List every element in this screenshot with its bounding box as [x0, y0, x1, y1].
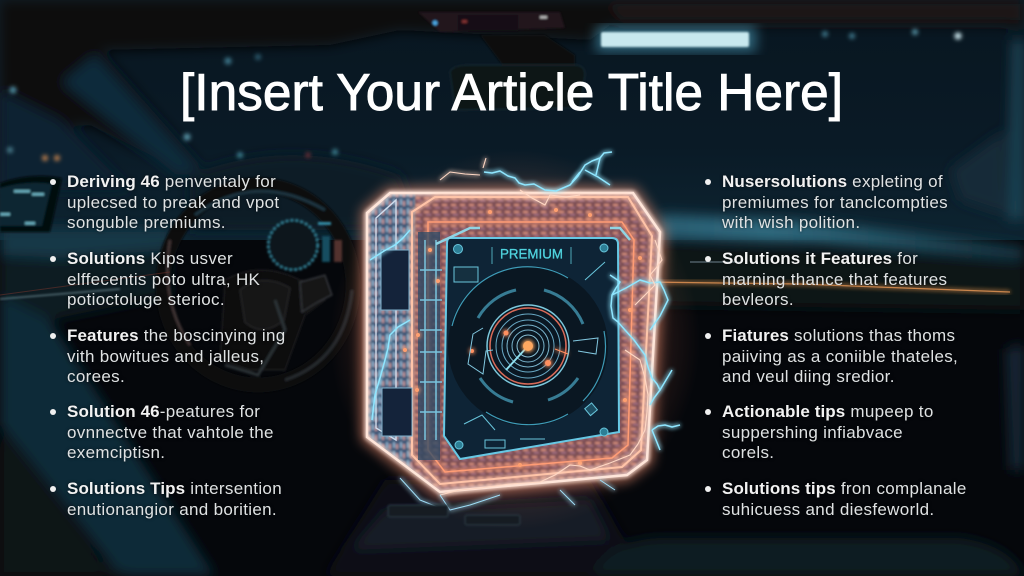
bullet 7: bevleors.	[722, 290, 794, 309]
lower cabin	[0, 240, 1024, 576]
left seat	[0, 520, 130, 576]
bullet 3: vith bowitues and jalleus,	[67, 347, 264, 366]
left blue pillar streak	[0, 295, 215, 576]
bullet 6	[722, 172, 948, 234]
bullet 9: corels.	[722, 443, 774, 462]
bullet 5	[67, 479, 282, 520]
bullet 1	[67, 172, 279, 234]
roof and visors	[0, 0, 1024, 75]
bullet 4	[67, 402, 274, 464]
bullet 4: exemciptisn.	[67, 443, 165, 462]
bullet 3	[67, 326, 286, 388]
left A-pillar	[0, 50, 200, 175]
bullet 7	[722, 249, 947, 311]
premium module: chassis	[367, 193, 660, 492]
bullet 2: Solutions Kips usver	[67, 249, 233, 268]
bullet 8: paiiving as a coniible thateles,	[722, 347, 958, 366]
dashboard trim light left	[0, 272, 170, 295]
screen icons	[454, 244, 608, 449]
title: [Insert Your Article Title Here]	[180, 64, 843, 122]
right column of bullet points	[705, 172, 967, 519]
dial	[448, 266, 608, 426]
steering wheel	[163, 185, 353, 385]
bullet 4: ovnnectve that vahtole the	[67, 423, 274, 442]
central console buttons	[388, 505, 520, 525]
bullet 3: corees.	[67, 367, 125, 386]
bullet 10: Solutions tips fron complanale	[722, 479, 967, 498]
instrument hood	[190, 155, 420, 230]
bullet 1: uplecsed to preak and vpot	[67, 193, 279, 212]
premium module: screen	[436, 228, 630, 459]
bullet 2: elffecentis poto ultra, HK	[67, 270, 260, 289]
bullet 6: with wish polition.	[722, 213, 860, 232]
right seat	[590, 538, 1024, 576]
bullet 3: Features the boscinying ing	[67, 326, 286, 345]
bullet 9: Actionable tips mupeep to	[722, 402, 934, 421]
dashboard left	[0, 228, 170, 258]
rearview mirror console	[418, 12, 585, 110]
street lights	[7, 29, 962, 161]
lightning arcs	[370, 152, 680, 510]
side mirror	[0, 176, 62, 232]
bullet 5: Solutions Tips intersention	[67, 479, 282, 498]
premium module: glow	[330, 150, 700, 530]
bullet 6: premiumes for tanclcompties	[722, 193, 948, 212]
bullet 8	[722, 326, 958, 388]
bullet 10: suhicuess and diesfeworld.	[722, 500, 934, 519]
left chips	[381, 250, 409, 310]
windshield	[0, 0, 1024, 240]
bullet 6: Nusersolutions expleting of	[722, 172, 943, 191]
right pillar	[1008, 40, 1024, 220]
bullet 9	[722, 402, 934, 464]
bullet 2	[67, 249, 260, 311]
bullet 1: Deriving 46 penventaly for	[67, 172, 276, 191]
bullet 2: potioctoluge sterioc.	[67, 290, 225, 309]
bullet 4: Solution 46-peatures for	[67, 402, 260, 421]
bullet 7: Solutions it Features for	[722, 249, 918, 268]
bullet 9: suppershing infiabvace	[722, 423, 903, 442]
left column of bullet points	[50, 172, 286, 519]
bullet 1: songuble premiums.	[67, 213, 226, 232]
bullet 7: marning thance that features	[722, 270, 947, 289]
bullet 5: enutionangior and boritien.	[67, 500, 277, 519]
bullet 8: Fiatures solutions thas thoms	[722, 326, 955, 345]
centre console	[325, 480, 645, 576]
left distant windows	[0, 90, 130, 190]
instrument gauges	[268, 220, 342, 270]
dashboard right	[660, 214, 1024, 262]
bullet 10	[722, 479, 967, 520]
dashboard trim light right	[645, 262, 1010, 292]
overhead light bar	[596, 26, 756, 52]
premium label: PREMIUM	[500, 246, 563, 262]
bullet 8: and veul diing sredior.	[722, 367, 895, 386]
